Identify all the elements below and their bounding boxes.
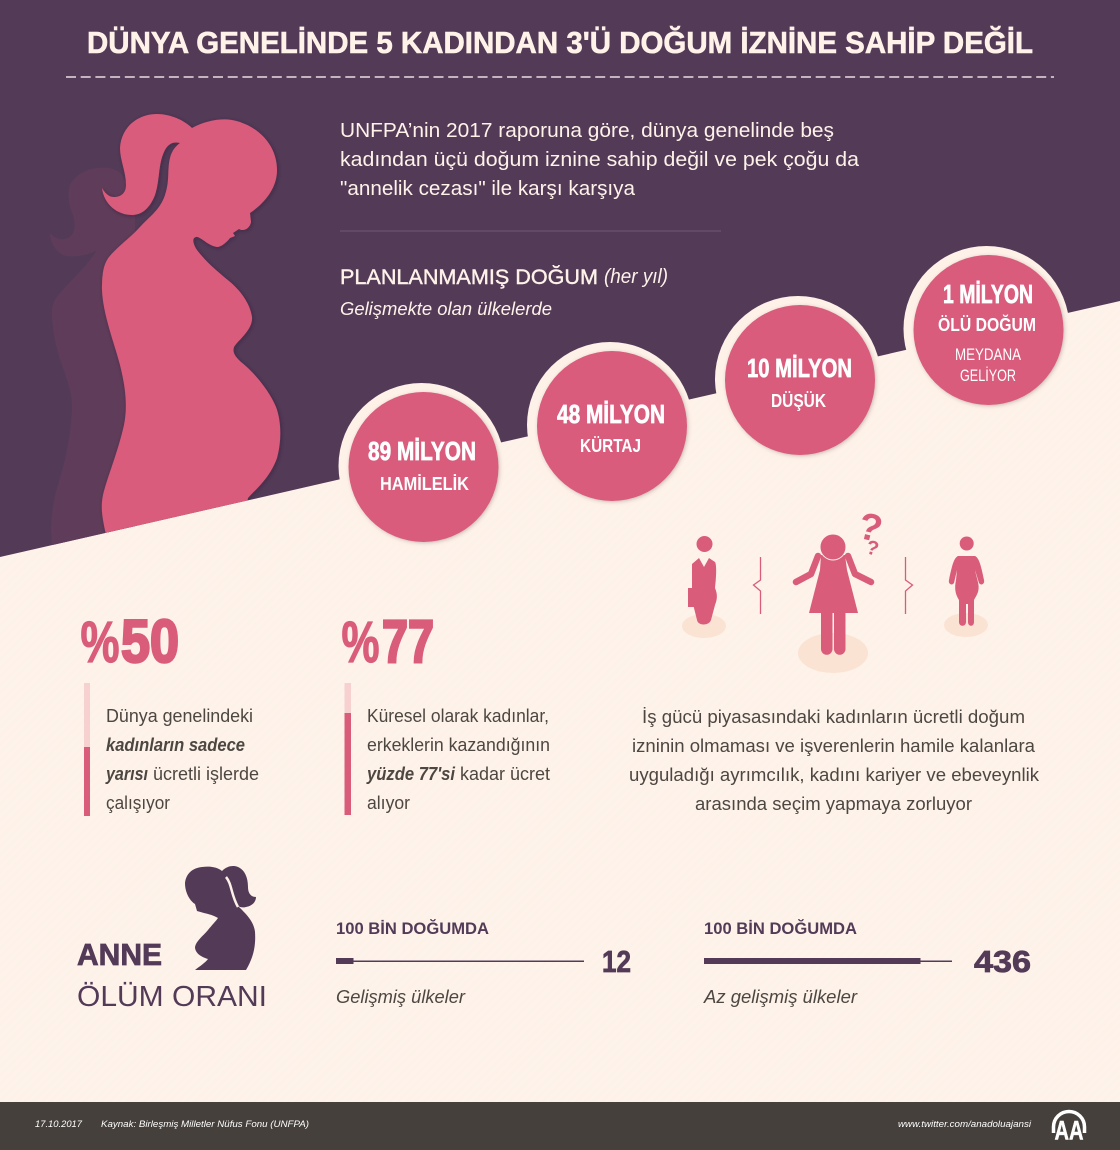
section heading: unplanned births: (her yıl)	[604, 266, 668, 288]
stat circle: 1 milyon: MEYDANA	[955, 345, 1022, 364]
icon: confused woman: ?	[864, 537, 881, 561]
icon: pregnant woman pictogram	[949, 536, 984, 626]
stat circle: 1 milyon: GELİYOR	[960, 366, 1016, 385]
icon: businesswoman	[688, 536, 717, 624]
intro paragraph	[340, 119, 860, 200]
stat circle: 10 milyon: 10 MİLYON	[747, 353, 852, 383]
icon: confused woman: ?	[854, 505, 887, 551]
ghost silhouette	[50, 168, 135, 545]
stat: %50: çalışıyor	[106, 793, 170, 813]
stat: %50	[80, 608, 259, 816]
heading: maternal mortality	[77, 937, 267, 1013]
illustration: pregnant woman silhouette	[50, 114, 280, 545]
chart: developed countries: 12	[602, 944, 631, 979]
paragraph: discrimination	[629, 707, 1040, 814]
chart: developed countries: Gelişmiş ülkeler	[336, 987, 466, 1007]
paragraph: discrimination: izninin olmaması ve işverenlerin hamile kalanlara	[632, 736, 1036, 756]
stat: %50: 50	[121, 608, 179, 675]
stat circle: 89 milyon: 89 MİLYON	[368, 436, 476, 466]
stat: %50: kadınların sadece	[106, 735, 245, 755]
chart: developed countries	[336, 919, 631, 1007]
intro paragraph: "annelik cezası" ile karşı karşıya	[340, 177, 636, 200]
section heading: unplanned births: PLANLANMAMIŞ DOĞUM	[340, 266, 598, 289]
paragraph: discrimination: uyguladığı ayrımcılık, kadını kariyer ve ebeveynlik	[629, 765, 1040, 785]
section heading: unplanned births	[340, 266, 668, 319]
chart: least developed countries: 436	[974, 944, 1031, 979]
logo: AA: AA	[1054, 1116, 1084, 1146]
divider left	[754, 557, 760, 614]
chart: developed countries: 100 BİN DOĞUMDA	[336, 919, 489, 938]
stat: %50: Dünya genelindeki	[106, 706, 253, 726]
stat: %50: %	[80, 610, 120, 675]
paragraph: discrimination: İş gücü piyasasındaki kadınların ücretli doğum	[642, 707, 1025, 727]
progress bar 50	[84, 683, 90, 816]
stat circle: 48 milyon: KÜRTAJ	[580, 436, 641, 456]
stat: %77: %	[342, 610, 380, 675]
stat circle: 1 milyon: 1 MİLYON	[943, 279, 1033, 309]
stat circle: 1 milyon: ÖLÜ DOĞUM	[938, 314, 1036, 335]
intro paragraph: UNFPA’nin 2017 raporuna göre, dünya genelinde beş	[340, 119, 834, 142]
progress bar 77	[344, 683, 351, 815]
stat: %50: ücretli işlerde	[153, 764, 259, 784]
stat: %77: kadar ücret	[460, 764, 550, 784]
stat: %50: yarısı	[105, 764, 148, 784]
title: DÜNYA GENELİNDE 5 KADINDAN 3'Ü DOĞUM İZNİNE SAHİP DEĞİL	[87, 25, 1033, 60]
stat circle: 89 milyon: HAMİLELİK	[380, 474, 469, 494]
stat: %77: 77	[382, 608, 434, 675]
stat circle: 48 milyon	[527, 342, 693, 508]
dark purple diagonal header panel	[0, 0, 1120, 557]
footer: Kaynak: Birleşmiş Milletler Nüfus Fonu (UNFPA)	[101, 1119, 309, 1130]
chart: least developed countries: 100 BİN DOĞUMDA	[704, 919, 857, 938]
icon: small mother silhouette	[185, 866, 256, 970]
footer: www.twitter.com/anadoluajansi	[898, 1119, 1032, 1130]
stat circle: 89 milyon	[338, 383, 504, 549]
stat: %77: alıyor	[367, 793, 410, 813]
chart: least developed countries	[703, 919, 1031, 1007]
stat: %77: yüzde 77'si	[366, 764, 456, 784]
stat circle: 10 milyon: DÜŞÜK	[771, 391, 826, 411]
stat circle: 1 milyon	[904, 246, 1070, 412]
stat circle: 48 milyon: 48 MİLYON	[557, 399, 665, 429]
paragraph: discrimination: arasında seçim yapmaya zorluyor	[695, 794, 972, 814]
icon: confused woman	[796, 505, 887, 655]
divider right	[906, 557, 912, 614]
footer: 17.10.2017	[35, 1119, 83, 1130]
stat: %77	[342, 608, 550, 815]
section heading: unplanned births: Gelişmekte olan ülkelerde	[340, 298, 552, 319]
stat: %77: Küresel olarak kadınlar,	[367, 706, 549, 726]
stat: %77: erkeklerin kazandığının	[367, 735, 550, 755]
heading: maternal mortality: ÖLÜM ORANI	[77, 981, 267, 1013]
logo: AA	[1054, 1112, 1084, 1146]
stat circle: 10 milyon	[715, 296, 881, 462]
heading: maternal mortality: ANNE	[77, 937, 162, 972]
main silhouette	[102, 114, 280, 540]
icons: career versus motherhood	[682, 505, 988, 673]
chart: least developed countries: Az gelişmiş ülkeler	[703, 987, 858, 1007]
footer	[0, 1102, 1120, 1150]
intro paragraph: kadından üçü doğum iznine sahip değil ve pek çoğu da	[340, 148, 860, 171]
